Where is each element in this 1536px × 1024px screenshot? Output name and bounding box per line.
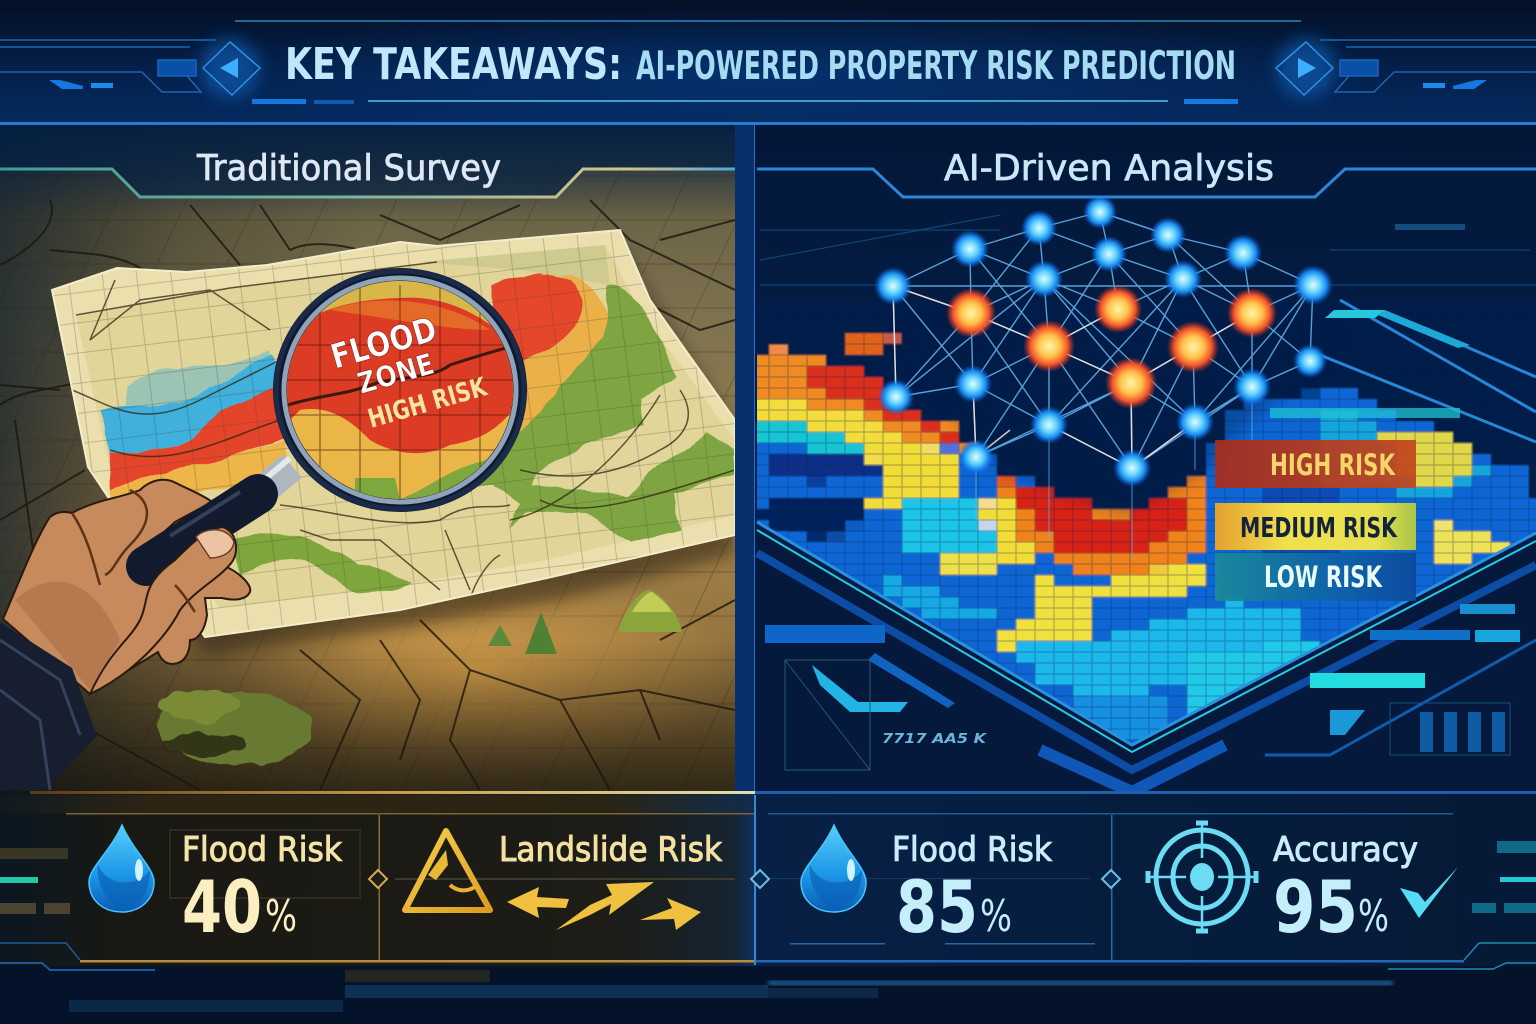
- panel heading plate: [0, 133, 735, 196]
- icon: warning triangle: [405, 831, 490, 910]
- platform frame: [757, 300, 1536, 800]
- header band: [0, 0, 1536, 140]
- magnifier lens: FLOOD: [326, 309, 441, 378]
- stat: ai accuracy: %: [1358, 891, 1389, 942]
- stat: ai accuracy: Accuracy: [1273, 830, 1418, 870]
- stat: traditional landslide risk: Landslide Risk: [499, 830, 722, 870]
- panel heading plate: [1100, 195, 1101, 196]
- heading frame lines: [0, 169, 1536, 197]
- icon: landslide arrows: [507, 882, 701, 930]
- stat: ai flood risk: [801, 825, 1052, 949]
- legend: medium risk: [1215, 503, 1416, 550]
- stat: ai flood risk: 85: [896, 865, 978, 949]
- icon: hand front: [0, 490, 236, 790]
- icon: target: [1148, 823, 1256, 931]
- panel: traditional survey: [0, 125, 740, 795]
- magnifier lens: [273, 268, 527, 512]
- risk legend: [1215, 440, 1416, 601]
- stat: ai accuracy: 95: [1273, 865, 1358, 949]
- sleeve: [0, 622, 97, 790]
- stat: traditional flood risk: [89, 825, 342, 949]
- stat: ai accuracy: [1148, 823, 1458, 949]
- stat: ai flood risk: %: [980, 891, 1012, 942]
- legend: high risk: HIGH RISK: [1270, 448, 1396, 482]
- hud details: 7717 AA5 K: [882, 732, 987, 747]
- heading: ai-driven analysis: AI-Driven Analysis: [944, 148, 1274, 189]
- stat: traditional flood risk: 40: [182, 865, 262, 949]
- olive patch: [157, 687, 313, 764]
- neural network: [874, 195, 1333, 560]
- icon: magnifying glass: [146, 268, 527, 566]
- icon: water drop: [89, 825, 154, 912]
- icon: check mark: [1400, 867, 1458, 918]
- header ornament left: [0, 38, 260, 98]
- title: KEY TAKEAWAYS:: [285, 39, 622, 90]
- header ornament right: [1276, 38, 1536, 98]
- network nodes: [874, 195, 1333, 487]
- paper map: [40, 225, 740, 645]
- icon: trees: [488, 590, 682, 654]
- legend: medium risk: MEDIUM RISK: [1240, 511, 1398, 544]
- ground terrain: [0, 125, 740, 795]
- magnifier handle: [146, 458, 292, 566]
- divider: [735, 125, 757, 795]
- panel: ai-driven analysis: [750, 125, 1536, 804]
- heading: traditional survey: Traditional Survey: [196, 148, 501, 189]
- hud details: [765, 224, 1536, 770]
- stat: traditional flood risk: Flood Risk: [182, 830, 342, 870]
- stat: ai flood risk: Flood Risk: [892, 830, 1052, 870]
- footer hud: [0, 943, 1536, 1012]
- heatmap: [757, 332, 1536, 744]
- magnifier lens: ZONE: [354, 347, 438, 401]
- stat: traditional flood risk: %: [265, 891, 297, 942]
- title: AI-POWERED PROPERTY RISK PREDICTION: [636, 44, 1236, 89]
- icon: hand back: [3, 480, 250, 694]
- legend: low risk: LOW RISK: [1264, 560, 1383, 594]
- icon: water drop: [801, 825, 866, 912]
- bottom stats band: [0, 791, 1536, 966]
- legend: high risk: [1215, 440, 1416, 488]
- map shadow: [190, 254, 735, 662]
- title: [285, 39, 1236, 90]
- hud background lines: [760, 215, 1536, 285]
- stat: traditional landslide risk: [405, 830, 722, 930]
- legend: low risk: [1215, 553, 1416, 601]
- network backdrop: [900, 335, 1340, 512]
- magnifier lens: HIGH RISK: [365, 372, 491, 435]
